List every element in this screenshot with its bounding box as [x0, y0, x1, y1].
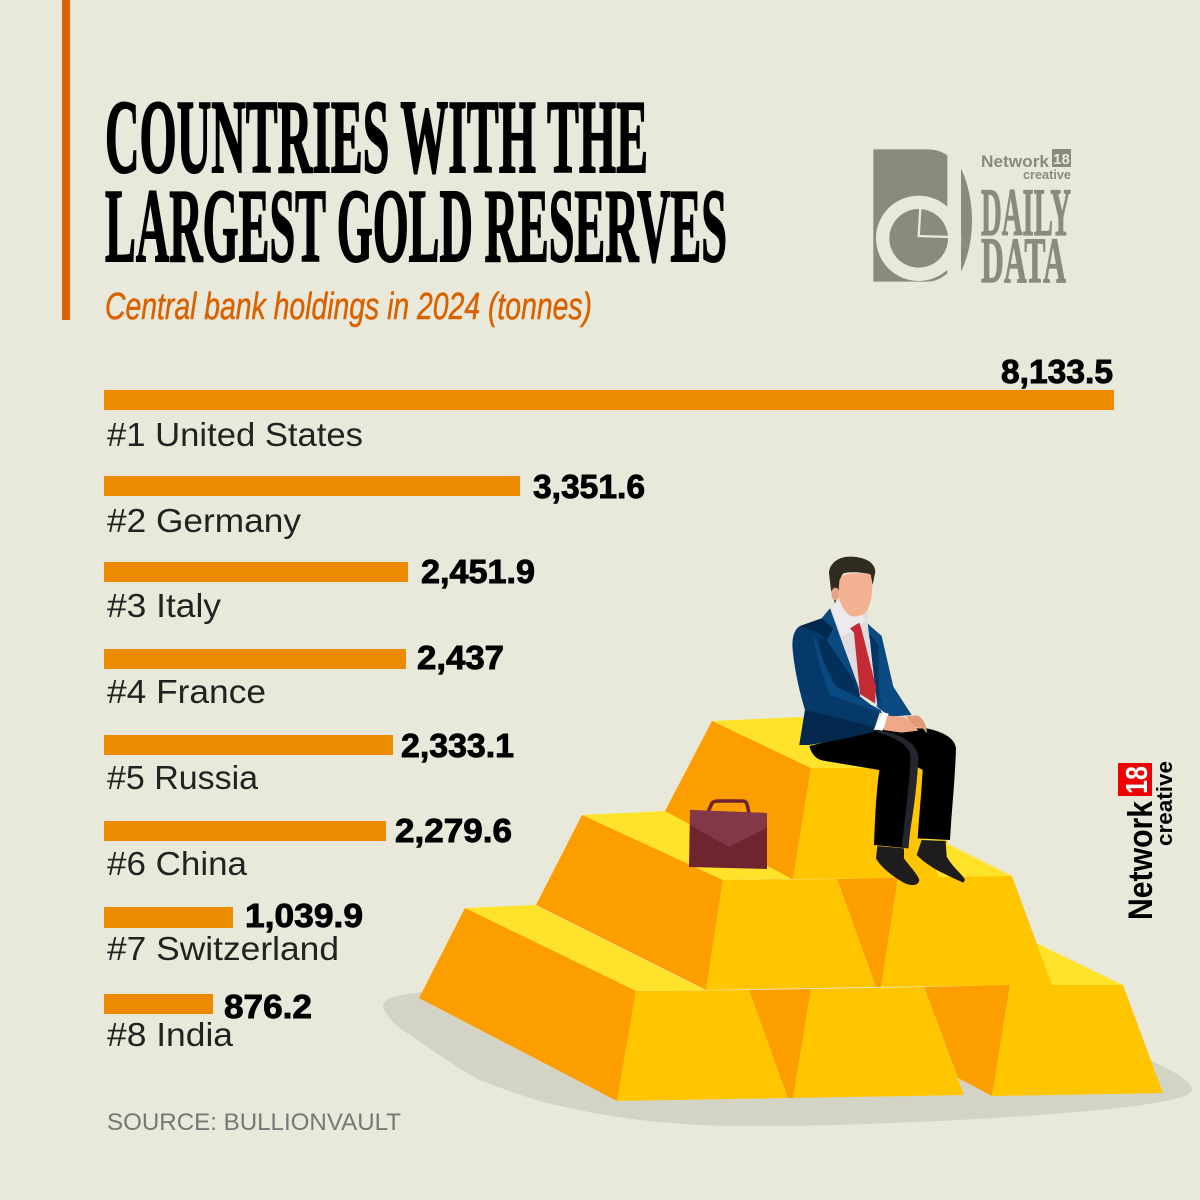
jacket dark lapel right [869, 633, 883, 703]
accent bar [62, 0, 70, 320]
collar [830, 602, 866, 637]
lapel [822, 608, 860, 697]
icon: pie chart letter d [873, 149, 972, 282]
hair [829, 557, 875, 603]
bar: France [104, 639, 504, 710]
gold bar: middle right [837, 876, 1052, 987]
logo: Daily Data [873, 149, 1071, 297]
gold bar: middle back right [920, 830, 1012, 880]
sleeve highlight [813, 637, 882, 713]
logo wordmark: DATA [981, 225, 1066, 297]
bar: China: #6 China [107, 845, 248, 882]
trouser highlight [875, 730, 918, 848]
bar: France: 2,437 [417, 639, 504, 676]
bar: India [104, 988, 312, 1053]
illustration: businessman [792, 557, 965, 885]
bar: Switzerland: 1,039.9 [245, 897, 363, 934]
tie [850, 623, 876, 703]
ear [831, 588, 839, 600]
logo: Network18 creative vertical: Network [1122, 801, 1160, 920]
text: DAILY [981, 174, 1071, 250]
bar: United States: 8,133.5 [1001, 353, 1113, 390]
bar: Switzerland: #7 Switzerland [107, 930, 339, 967]
logo wordmark [981, 149, 1071, 297]
face [838, 573, 872, 616]
bar: Russia [104, 727, 514, 796]
hands [883, 715, 927, 733]
icon: briefcase [689, 801, 767, 869]
gold bar: back right top [1030, 940, 1123, 986]
gold bar: middle left [536, 811, 876, 990]
shoulder shade [800, 618, 833, 640]
trousers [809, 728, 956, 848]
shoes [876, 840, 965, 885]
bar: Germany: 3,351.6 [533, 468, 645, 505]
bar: Italy: 2,451.9 [421, 553, 535, 590]
logo wordmark: Network [981, 152, 1050, 171]
illustration: gold pile [383, 717, 1192, 1126]
gold bar: bottom middle [749, 987, 964, 1098]
subtitle: Central bank holdings in 2024 (tonnes) [105, 286, 592, 328]
shirt [830, 602, 877, 706]
bar: Italy: #3 Italy [107, 587, 222, 624]
bar: India: #8 India [107, 1016, 234, 1053]
gold bar: top [665, 717, 960, 880]
shadow [383, 992, 1192, 1126]
logo wordmark: 18 [1053, 151, 1070, 168]
dark panel below lapel [817, 637, 860, 697]
bar: China: 2,279.6 [395, 812, 512, 849]
bar: China [104, 812, 512, 882]
logo: Network18 creative vertical: 18 [1119, 766, 1154, 794]
logo: Network18 creative vertical: creative [1152, 761, 1177, 846]
title [105, 78, 727, 284]
bar: Germany: #2 Germany [107, 502, 302, 539]
jacket lower [799, 710, 874, 745]
logo: Network18 creative vertical [1118, 761, 1177, 920]
bar: France: #4 France [107, 673, 266, 710]
gold bar: bottom left [419, 905, 788, 1101]
bar chart [104, 353, 1114, 1053]
gold bar: bottom right [924, 985, 1163, 1096]
source: SOURCE: BULLIONVAULT [107, 1109, 401, 1136]
bar: Switzerland [104, 897, 363, 967]
bar: Germany [104, 468, 645, 539]
bar: India: 876.2 [224, 988, 312, 1025]
jacket right side [862, 618, 912, 717]
bar: Italy [104, 553, 535, 624]
bar: Russia: #5 Russia [107, 759, 259, 796]
logo wordmark: creative [1023, 167, 1071, 182]
bar: United States: #1 United States [107, 416, 363, 453]
jacket body [792, 608, 880, 745]
cuff [875, 712, 889, 731]
bar: United States [104, 353, 1114, 453]
bar: Russia: 2,333.1 [401, 727, 514, 764]
